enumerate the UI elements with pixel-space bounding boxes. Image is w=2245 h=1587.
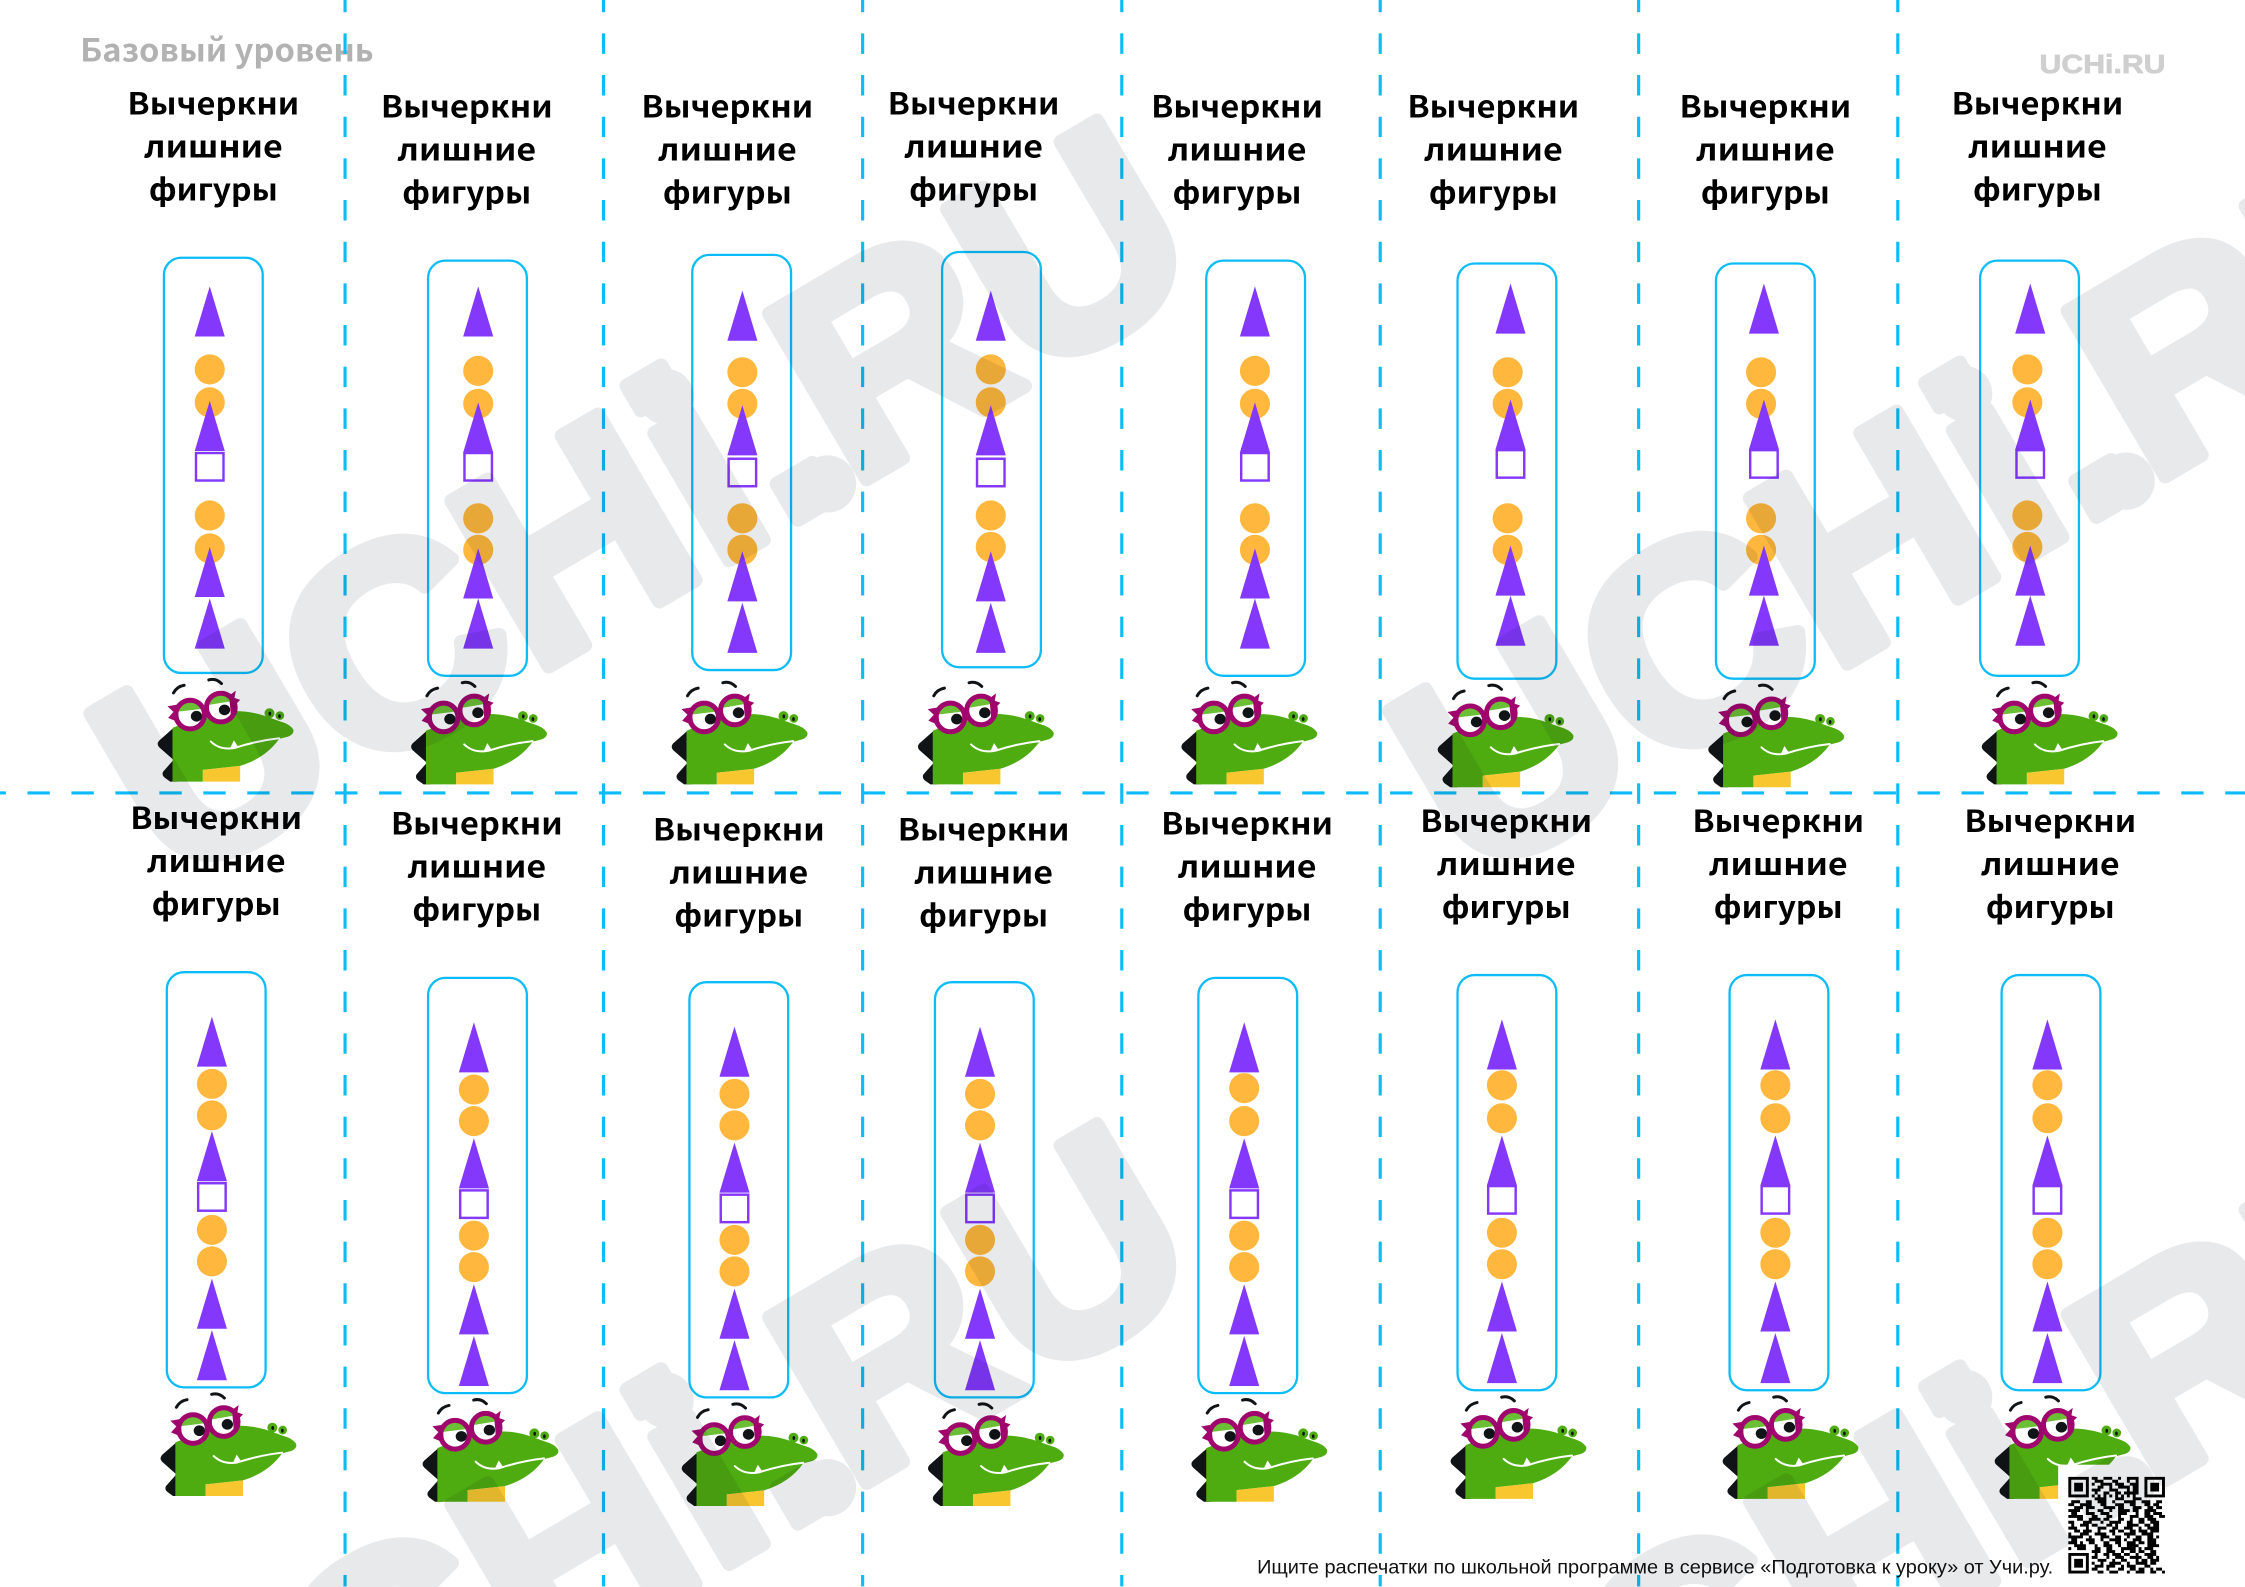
task title: фигуры bbox=[412, 886, 541, 930]
shape strip bbox=[1716, 263, 1815, 679]
task title: фигуры bbox=[663, 168, 792, 212]
task title bbox=[888, 80, 1060, 209]
task title: Вычеркни bbox=[381, 82, 553, 126]
icon: crocodile bbox=[1451, 1397, 1586, 1499]
shape strip bbox=[1458, 975, 1556, 1390]
icon: crocodile bbox=[1995, 1397, 2130, 1499]
QR code bbox=[2058, 1465, 2168, 1576]
task title: Вычеркни bbox=[898, 805, 1070, 849]
task title: лишние bbox=[1424, 125, 1563, 169]
task title: Вычеркни bbox=[1692, 797, 1864, 841]
task title bbox=[1407, 82, 1579, 212]
task title: Вычеркни bbox=[888, 80, 1060, 124]
level label: Базовый уровень bbox=[80, 26, 374, 72]
shape strip bbox=[167, 972, 266, 1387]
task title bbox=[1692, 797, 1864, 927]
task title bbox=[1951, 80, 2123, 209]
card 3 top bbox=[641, 82, 813, 784]
card 8 bottom bbox=[1964, 797, 2136, 1499]
icon: crocodile bbox=[1982, 682, 2118, 784]
task title: лишние bbox=[1968, 123, 2107, 167]
task title: лишние bbox=[1696, 125, 1835, 169]
task title: фигуры bbox=[674, 891, 803, 935]
task title: Вычеркни bbox=[391, 800, 563, 844]
card 1 bottom bbox=[130, 794, 302, 1496]
task title: фигуры bbox=[909, 165, 1038, 209]
icon: crocodile bbox=[158, 679, 293, 782]
task title: фигуры bbox=[1973, 165, 2102, 209]
task title: Вычеркни bbox=[1679, 82, 1851, 126]
task title: фигуры bbox=[1701, 168, 1830, 212]
icon: crocodile bbox=[1191, 1400, 1327, 1502]
task title: фигуры bbox=[149, 165, 278, 209]
icon: crocodile bbox=[161, 1394, 296, 1496]
shape strip bbox=[1730, 975, 1828, 1390]
card 6 top bbox=[1407, 82, 1579, 787]
task title: лишние bbox=[1709, 840, 1848, 884]
task title: Вычеркни bbox=[127, 80, 299, 124]
icon: crocodile bbox=[918, 682, 1054, 784]
icon: crocodile bbox=[1723, 1397, 1858, 1499]
task title bbox=[1964, 797, 2136, 927]
icon: crocodile bbox=[1438, 685, 1573, 787]
card 2 bottom bbox=[391, 800, 563, 1502]
task title: лишние bbox=[658, 125, 797, 169]
card 7 bottom bbox=[1692, 797, 1864, 1499]
card 3 bottom bbox=[653, 805, 825, 1506]
task title: фигуры bbox=[1442, 883, 1571, 927]
card 5 bottom bbox=[1161, 800, 1333, 1502]
card 7 top bbox=[1679, 82, 1851, 787]
task title bbox=[391, 800, 563, 930]
card 1 top bbox=[127, 80, 299, 782]
shape strip bbox=[164, 258, 263, 673]
shape strip bbox=[1198, 978, 1297, 1393]
icon: crocodile bbox=[1708, 685, 1844, 787]
task title: лишние bbox=[1168, 125, 1306, 169]
card 5 top bbox=[1151, 82, 1323, 784]
task title: фигуры bbox=[1986, 883, 2115, 927]
task title: фигуры bbox=[152, 880, 281, 924]
task title: лишние bbox=[1178, 843, 1317, 887]
card 4 top bbox=[888, 80, 1060, 784]
card 2 top bbox=[381, 82, 553, 784]
icon: crocodile bbox=[672, 682, 807, 784]
task title bbox=[1161, 800, 1333, 930]
task title bbox=[130, 794, 302, 924]
shape strip bbox=[1206, 261, 1305, 676]
icon: crocodile bbox=[1181, 682, 1317, 784]
task title: Вычеркни bbox=[641, 82, 813, 126]
task title bbox=[1420, 797, 1592, 927]
task title: Вычеркни bbox=[1964, 797, 2136, 841]
task title: лишние bbox=[144, 123, 283, 167]
task title: лишние bbox=[914, 848, 1053, 892]
footer note: Ищите распечатки по школьной программе в сервисе «Подготовка к уроку» от Учи.ру. bbox=[1257, 1558, 2053, 1579]
task title: Вычеркни bbox=[130, 794, 302, 838]
task title: Вычеркни bbox=[1151, 82, 1323, 126]
task title bbox=[381, 82, 553, 212]
task title: фигуры bbox=[919, 891, 1048, 935]
task title: лишние bbox=[407, 843, 546, 887]
task title bbox=[1679, 82, 1851, 212]
shape strip bbox=[1980, 261, 2079, 676]
task title: лишние bbox=[904, 123, 1043, 167]
task title: лишние bbox=[669, 848, 808, 892]
icon: crocodile bbox=[682, 1404, 818, 1506]
shape strip bbox=[935, 982, 1034, 1397]
shape strip bbox=[428, 978, 527, 1393]
task title: фигуры bbox=[402, 168, 531, 212]
shape strip bbox=[428, 261, 527, 676]
shape strip bbox=[2002, 975, 2100, 1390]
card 6 bottom bbox=[1420, 797, 1592, 1499]
task title: фигуры bbox=[1183, 886, 1311, 930]
task title: Вычеркни bbox=[1161, 800, 1333, 844]
shape strip bbox=[689, 982, 788, 1397]
task title: Вычеркни bbox=[653, 805, 825, 849]
task title: Вычеркни bbox=[1407, 82, 1579, 126]
task title: фигуры bbox=[1173, 168, 1301, 212]
icon: crocodile bbox=[423, 1400, 558, 1502]
task title bbox=[641, 82, 813, 212]
task title bbox=[1151, 82, 1323, 212]
shape strip bbox=[942, 252, 1041, 667]
task title bbox=[653, 805, 825, 935]
watermark: UCHi.RU bbox=[45, 60, 1240, 939]
task title bbox=[898, 805, 1070, 935]
card 4 bottom bbox=[898, 805, 1070, 1506]
task title: лишние bbox=[147, 837, 286, 881]
task title: лишние bbox=[397, 125, 536, 169]
task title: Вычеркни bbox=[1420, 797, 1592, 841]
task title: лишние bbox=[1437, 840, 1576, 884]
task title: фигуры bbox=[1429, 168, 1558, 212]
task title: лишние bbox=[1981, 840, 2120, 884]
task title: Вычеркни bbox=[1951, 80, 2123, 124]
task title: фигуры bbox=[1714, 883, 1843, 927]
icon: crocodile bbox=[928, 1404, 1064, 1506]
shape strip bbox=[1458, 263, 1556, 679]
logo: UCHi.RU: UCHi.RU bbox=[2040, 51, 2166, 79]
shape strip bbox=[692, 255, 791, 670]
task title bbox=[127, 80, 299, 209]
icon: crocodile bbox=[411, 682, 547, 784]
card 8 top bbox=[1951, 80, 2123, 784]
